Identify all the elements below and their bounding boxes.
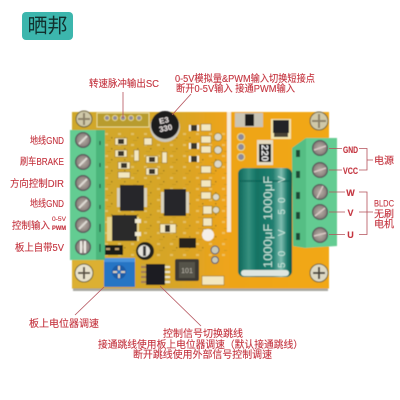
brand badge (22, 12, 73, 40)
top capacitor: 330 (158, 123, 174, 134)
main electrolytic capacitor (238, 168, 292, 277)
right motor labels with bracket: V (347, 208, 354, 218)
label: control signal jumper: 控制信号切换跳线 (163, 327, 243, 340)
top right resistor (235, 113, 263, 127)
left green terminal block (70, 130, 105, 260)
220 power resistor: 220 (258, 145, 270, 162)
brand badge: 晒邦 (28, 14, 68, 38)
small surface-mount parts (115, 124, 224, 285)
jumper header (101, 245, 123, 255)
label: control signal jumper: 断开跳线使用外部信号控制调速 (133, 348, 272, 361)
label: input mode short-circuit point (172, 72, 315, 115)
label: speed pulse output (89, 77, 159, 118)
mounting screws (75, 111, 328, 282)
main electrolytic capacitor: 1000μF 1000μF (261, 176, 275, 268)
right motor labels with bracket: 无刷 (374, 208, 394, 220)
label: speed pulse output: 转速脉冲输出SC (89, 77, 159, 90)
header pads (104, 116, 244, 160)
label: on-board potentiometer: 板上电位器调速 (29, 317, 99, 330)
right power labels with bracket: VCC (343, 166, 358, 176)
left terminal labels: 地线GND (30, 197, 64, 210)
right motor labels with bracket: W (346, 188, 355, 198)
right motor labels with bracket (329, 188, 394, 240)
right green terminal block (292, 138, 337, 248)
left terminal labels (10, 134, 66, 254)
circuit board (70, 111, 337, 291)
label: on-board potentiometer (29, 287, 104, 330)
main electrolytic capacitor: 50 V 50 V (277, 176, 288, 268)
right motor labels with bracket: BLDC (374, 198, 394, 210)
left terminal labels: PWM (52, 226, 66, 232)
left terminal labels: 板上自带5V (15, 241, 64, 254)
right motor labels with bracket: U (347, 230, 354, 240)
inductor: 101 (181, 268, 193, 275)
left terminal labels: 控制输入 (12, 219, 50, 232)
label: control signal jumper: 接通跳线使用板上电位器调速（默认接通跳线） (98, 338, 303, 351)
right motor labels with bracket: 电机 (374, 218, 394, 230)
220 power resistor (257, 140, 273, 165)
label: input mode short-circuit point: 0-5V模拟量&PWM输入切换短接点 (175, 72, 315, 85)
right power labels with bracket: 电源 (374, 154, 394, 167)
label: control signal jumper (98, 286, 303, 361)
small 8-pin chip (141, 264, 170, 285)
transistor (271, 119, 291, 139)
inductor (175, 259, 199, 281)
top capacitor (150, 111, 180, 142)
small capacitor (136, 242, 154, 260)
MOSFET (107, 215, 141, 241)
top capacitor: E3 (158, 115, 170, 126)
label: input mode short-circuit point: 断开0-5V输入 接通PWM输入 (176, 82, 295, 95)
left terminal labels: 刷车BRAKE (20, 155, 64, 168)
left terminal labels: 地线GND (30, 134, 64, 147)
left terminal labels: 0-5V (52, 217, 66, 223)
left terminal labels: 方向控制DIR (10, 177, 64, 190)
right power labels with bracket (329, 145, 394, 176)
blue potentiometer (104, 258, 135, 287)
right power labels with bracket: GND (343, 145, 358, 155)
control chips (117, 185, 189, 216)
